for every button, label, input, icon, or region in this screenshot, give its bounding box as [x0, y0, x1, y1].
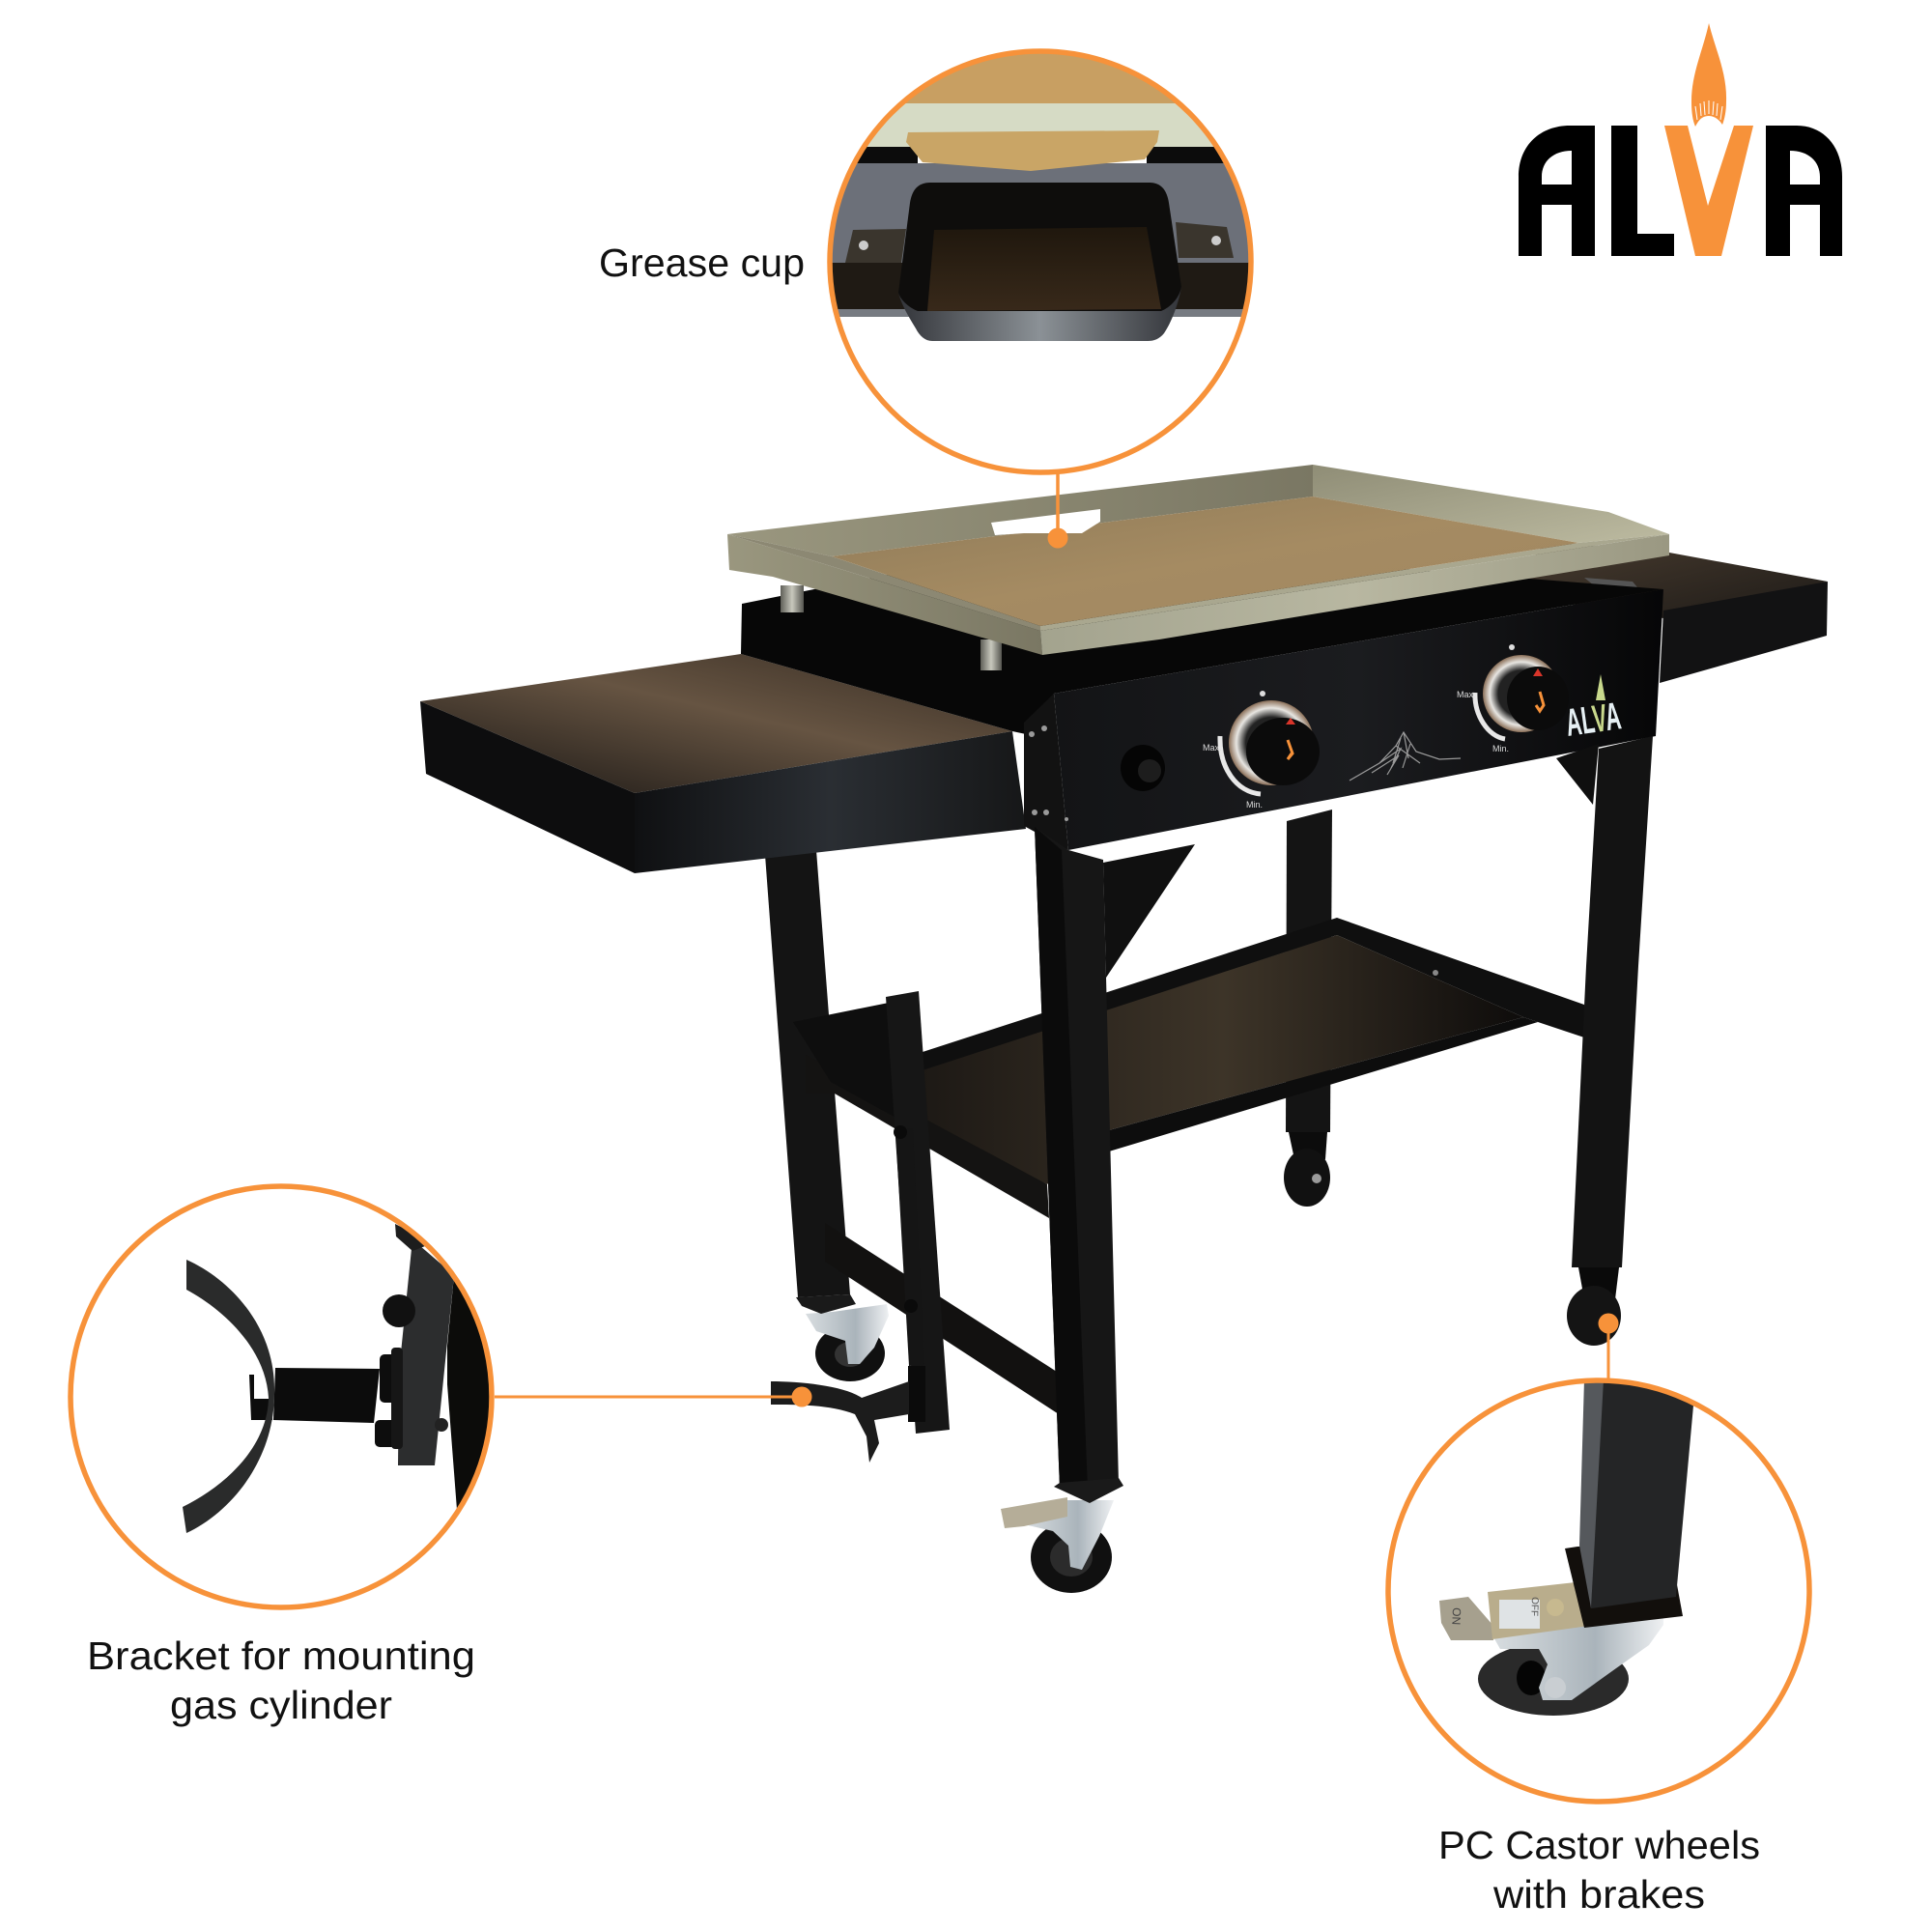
gas cylinder mounting frame: [793, 991, 950, 1434]
griddle support posts: [980, 639, 1002, 670]
front outer faces: [727, 534, 1042, 655]
side rail lower: [825, 1223, 1059, 1414]
product: griddle cart: [420, 465, 1828, 1593]
grease slot: [991, 509, 1100, 535]
rear left castor: [796, 1294, 889, 1381]
label: gas cylinder: [170, 1683, 392, 1727]
logo flame: [1691, 23, 1726, 127]
top and left frame: [741, 541, 1663, 734]
leader dot: [1047, 527, 1068, 549]
label: [87, 1634, 475, 1727]
castor fork: [1492, 1618, 1663, 1700]
leader line: [1607, 1323, 1609, 1379]
right side shelf: [1507, 541, 1828, 683]
bolts: [1029, 725, 1068, 821]
label: Bracket for mounting: [87, 1634, 475, 1678]
rear centre leg and wheel: [1284, 810, 1332, 1207]
front left leg and gusset: [1035, 827, 1195, 1489]
rear left leg: [765, 850, 1059, 1414]
callout: grease cup: [599, 48, 1265, 549]
gas cylinder bracket arm: [771, 1381, 909, 1463]
brake lever: [1439, 1597, 1493, 1640]
side rail upper: [806, 1055, 1049, 1218]
panel ALVA logo: [1563, 674, 1624, 745]
grease cup: [898, 287, 1181, 341]
label: with brakes: [1492, 1872, 1705, 1917]
knob right: Max.: [1457, 690, 1476, 699]
knob right: [1457, 644, 1569, 753]
detail circle: [1388, 1379, 1809, 1802]
detail circle: ON: [1449, 1607, 1463, 1625]
logo letter A: [1519, 126, 1595, 256]
knob left: Min.: [1246, 800, 1263, 810]
leader line: [1056, 472, 1060, 538]
mountain line art: [1350, 732, 1461, 781]
front castor with brake: [1001, 1478, 1123, 1593]
label: Grease cup: [599, 241, 805, 285]
leader line: [495, 1395, 802, 1399]
inner walls: [727, 465, 1313, 556]
griddle body housing: [741, 541, 1663, 850]
left side shelf: [420, 654, 1026, 873]
cup tabs: [845, 229, 906, 263]
panel ALVA logo: ALVA: [1563, 695, 1624, 745]
right front leg: [1556, 736, 1653, 1346]
wheel: [1478, 1642, 1629, 1716]
knob left: Max.: [1203, 743, 1222, 753]
control panel: [1054, 589, 1663, 850]
leader dot: [792, 1387, 811, 1406]
logo letter V: [1664, 126, 1753, 256]
griddle top plate: [727, 465, 1669, 655]
logo: ALVA: [1519, 23, 1842, 256]
cooking surface: [832, 497, 1578, 626]
knob right: Min.: [1492, 744, 1509, 753]
leg: [1591, 1379, 1695, 1608]
detail circle: [71, 1186, 502, 1607]
leader dot: [1598, 1314, 1619, 1333]
callout: castor wheels: [1388, 1314, 1809, 1917]
lower shelf and rails: [923, 918, 1584, 1184]
label: [1438, 1823, 1760, 1917]
knob left: [1203, 691, 1320, 810]
logo letter A right: [1766, 126, 1842, 256]
detail circle: [821, 48, 1265, 472]
logo letter L: [1611, 126, 1674, 256]
mounting plate: [1565, 1546, 1683, 1628]
ignitor button: [1121, 745, 1165, 791]
label: PC Castor wheels: [1438, 1823, 1760, 1867]
callout: bracket for mounting gas cylinder: [71, 1186, 811, 1727]
detail circle: OFF: [1528, 1597, 1540, 1616]
